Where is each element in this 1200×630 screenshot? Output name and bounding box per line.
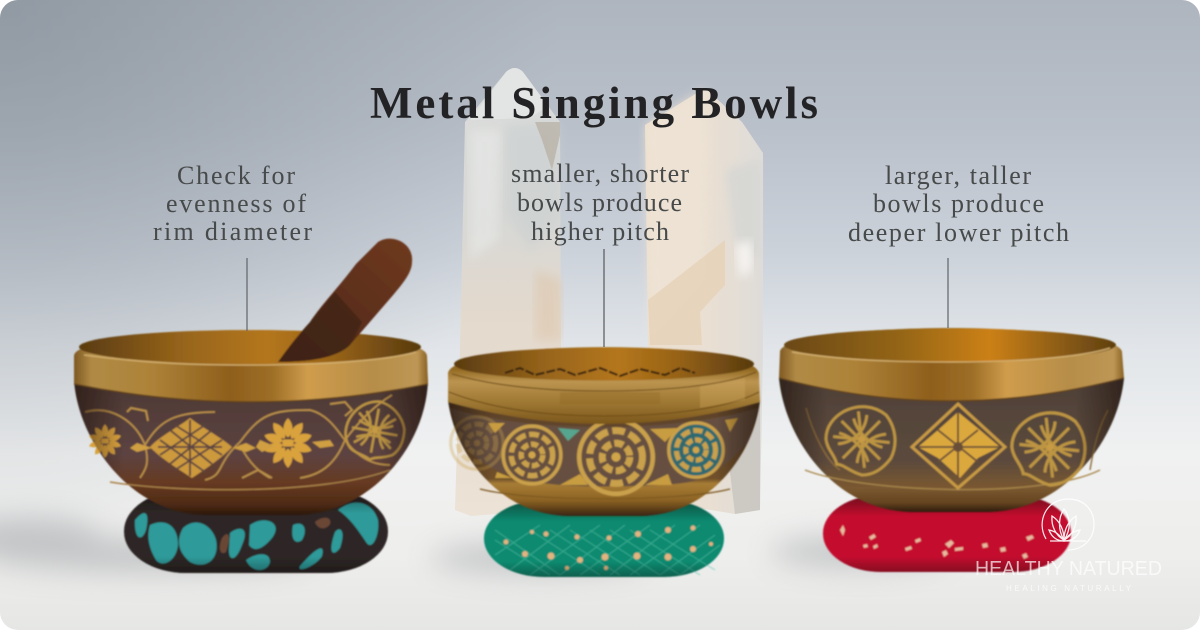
caption: higher pitch: higher pitch [531, 217, 669, 246]
caption: rim diameter [153, 161, 312, 246]
crystal: right quartz point [645, 88, 763, 514]
mallet [278, 239, 412, 362]
caption: rim diameter: Check for [177, 161, 295, 190]
cushion: dark teal [124, 490, 388, 573]
caption: lower pitch: deeper lower pitch [848, 218, 1069, 247]
callout line: rim diameter [246, 258, 248, 331]
logo: Healthy Natured: HEALING NATURALLY [1006, 584, 1132, 593]
caption: rim diameter: rim diameter [153, 217, 312, 246]
bowl 1 engraved pattern [85, 395, 409, 490]
bowl 2 engraved pattern [450, 408, 758, 499]
logo: Healthy Natured: HEALTHY NATURED [975, 558, 1162, 580]
caption: higher pitch [511, 159, 689, 246]
cushion: red [823, 495, 1071, 572]
floor shadows [0, 517, 950, 574]
caption: lower pitch [848, 161, 1069, 247]
caption: lower pitch: bowls produce [873, 189, 1044, 218]
bowl 2 [448, 347, 760, 516]
title: Metal Singing Bowls [370, 78, 818, 128]
caption: higher pitch: bowls produce [517, 188, 682, 217]
caption: higher pitch: smaller, shorter [511, 159, 689, 188]
bowl 3 [779, 328, 1124, 512]
logo: Healthy Natured [975, 499, 1162, 593]
bowl 1 with mallet [74, 239, 428, 515]
caption: lower pitch: larger, taller [885, 161, 1031, 190]
cushion: green [484, 500, 724, 577]
callout line: lower pitch [947, 258, 949, 328]
bowl 3 engraved pattern [805, 391, 1108, 500]
caption: rim diameter: evenness of [166, 189, 306, 218]
crystal: left quartz point [455, 68, 561, 516]
callout line: higher pitch [603, 249, 605, 347]
